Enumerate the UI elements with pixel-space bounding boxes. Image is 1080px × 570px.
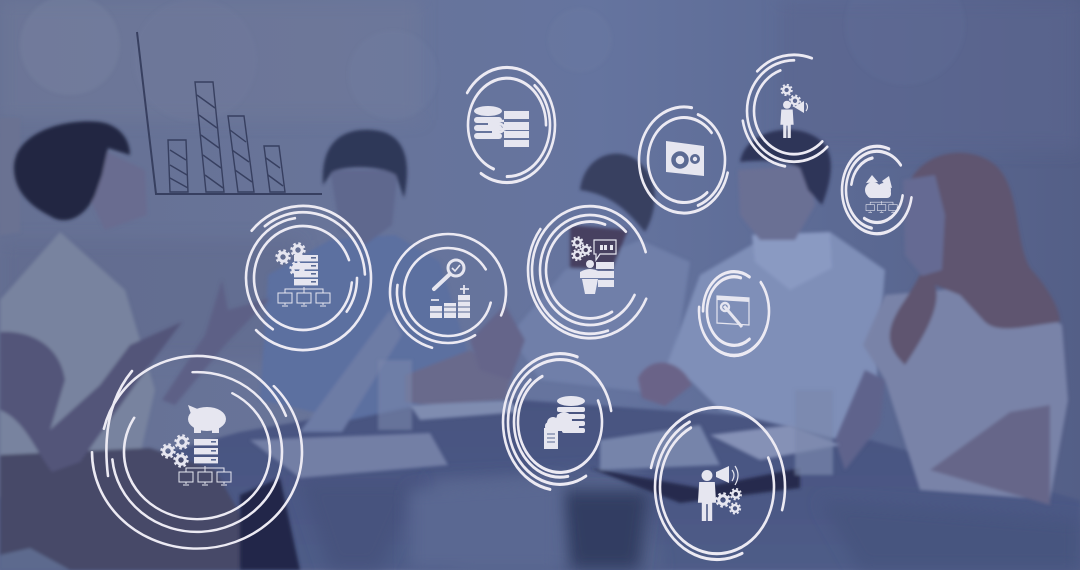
ring: speaker with gears <box>635 391 799 570</box>
ring: servers with gears and network <box>207 176 399 380</box>
ring: window with wrench <box>685 248 783 374</box>
icon: magnifier, plus, minus, data blocks <box>430 260 470 318</box>
ring: manager with servers and chat bubble <box>508 179 672 361</box>
man 3 <box>470 154 690 395</box>
icon: person, server, chat bubble, gears <box>572 237 616 294</box>
icon: cloud with computers <box>865 175 897 212</box>
icon: database, chain link, servers <box>474 106 529 147</box>
icon: piggy bank, gears, servers, computers <box>161 405 231 485</box>
icon: person, megaphone, gears <box>698 466 741 521</box>
laptop and notebooks on table <box>240 360 840 570</box>
ring: database linked to servers <box>440 45 574 205</box>
hand-drawn bar chart on whiteboard <box>137 32 322 194</box>
woman right <box>835 153 1068 505</box>
ring: analysis magnifier with data blocks <box>376 220 520 364</box>
ring: database, cloud and document <box>489 337 631 507</box>
ring: browser window with gears <box>629 96 739 224</box>
icon: person, megaphone, gears <box>780 85 808 138</box>
icon: gears, servers, computers <box>276 243 330 306</box>
man 2 <box>260 130 512 432</box>
icon: window with gears <box>666 141 704 176</box>
icon: window with wrench <box>717 296 749 327</box>
icon: database, cloud, document <box>544 396 585 449</box>
ring: piggy bank with gears and servers <box>49 315 345 570</box>
woman left <box>0 121 270 570</box>
ring: cloud with network <box>836 139 918 241</box>
ring: speaker with gears <box>720 32 868 190</box>
man 4 <box>638 130 885 440</box>
